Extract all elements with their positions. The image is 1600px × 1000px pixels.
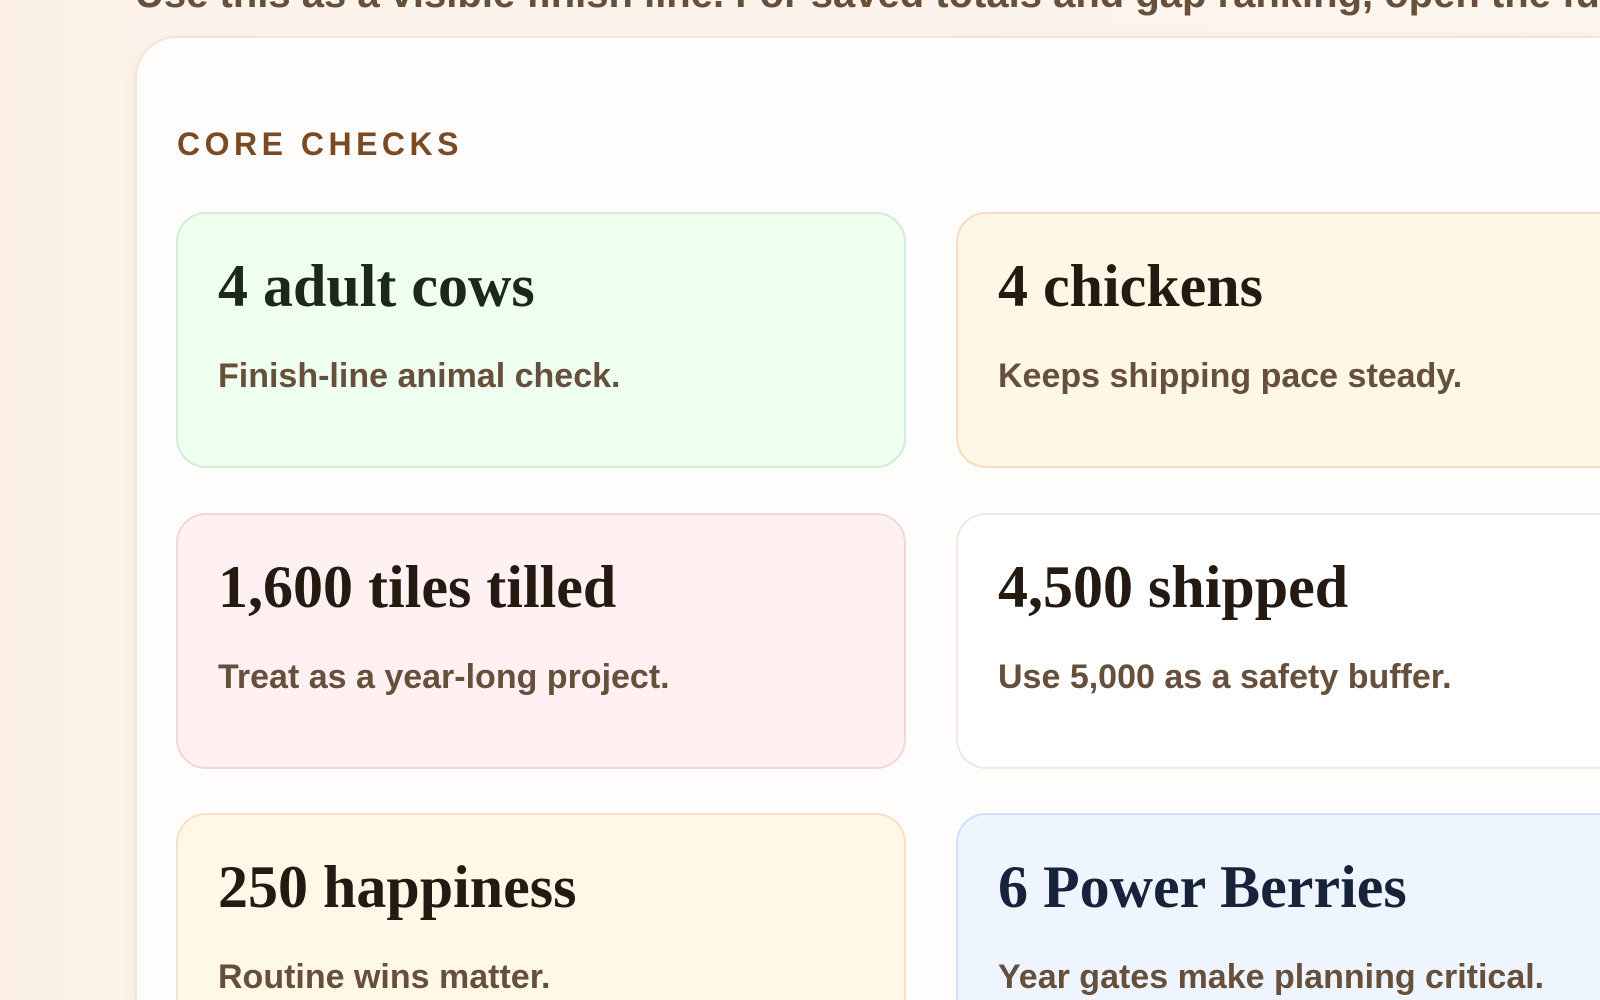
card: shipped: Use 5,000 as a safety buffer.: [998, 658, 1452, 696]
card: tiles: 1,600 tiles tilled: [218, 554, 616, 620]
card: cows: Finish-line animal check.: [218, 357, 620, 395]
card: cows: 4 adult cows: [218, 253, 535, 319]
card: power berries: Year gates make planning critical.: [998, 958, 1544, 996]
card: shipped: [956, 513, 1600, 769]
card: tiles: [176, 513, 906, 769]
heading: CORE CHECKS: [177, 126, 463, 162]
card: cows: [176, 212, 906, 468]
card: happiness: Routine wins matter.: [218, 958, 550, 996]
card: happiness: [176, 813, 906, 1000]
card: chickens: [956, 212, 1600, 468]
card: chickens: 4 chickens: [998, 253, 1263, 319]
card: power berries: [956, 813, 1600, 1000]
card: chickens: Keeps shipping pace steady.: [998, 357, 1462, 395]
card: power berries: 6 Power Berries: [998, 854, 1407, 920]
card: happiness: 250 happiness: [218, 854, 576, 920]
card: tiles: Treat as a year-long project.: [218, 658, 670, 696]
card: shipped: 4,500 shipped: [998, 554, 1348, 620]
